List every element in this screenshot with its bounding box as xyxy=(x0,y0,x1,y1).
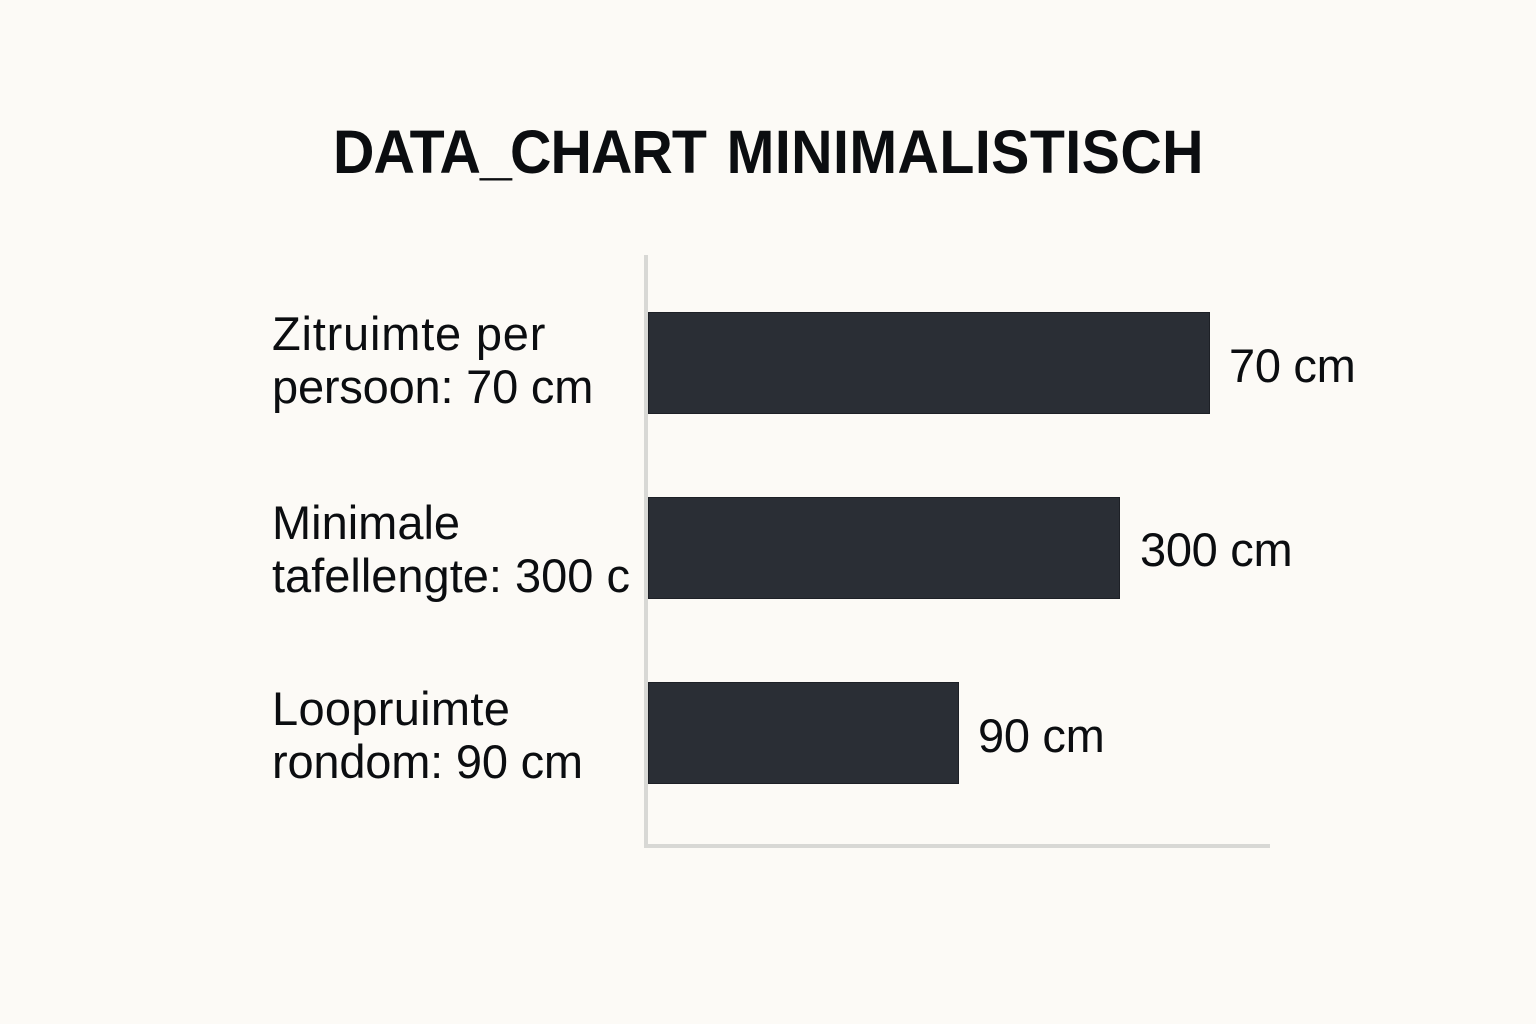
label: Zitruimte: Zitruimte per xyxy=(272,307,546,360)
bar: 70 cm xyxy=(648,312,1210,414)
bar: 90 cm xyxy=(648,682,959,784)
value: 70 cm: 70 cm xyxy=(1229,339,1356,392)
label: Minimale tafellengte: tafellengte: 300 c xyxy=(272,549,630,602)
label: Zitruimte xyxy=(272,307,593,413)
value: 300 cm: 300 cm xyxy=(1140,523,1292,576)
bar: 300 cm xyxy=(648,497,1120,599)
chart axes xyxy=(644,255,1270,848)
label: Loopruimte: Loopruimte xyxy=(272,682,510,735)
label: Loopruimte: rondom: 90 cm xyxy=(272,735,583,788)
label: Zitruimte: persoon: 70 cm xyxy=(272,360,593,413)
title: DATA_CHART MINIMALISTISCH xyxy=(333,118,1204,186)
label: Loopruimte xyxy=(272,682,583,788)
label: Minimale tafellengte: Minimale xyxy=(272,496,460,549)
label: Minimale tafellengte xyxy=(272,496,630,602)
value: 90 cm: 90 cm xyxy=(978,709,1104,762)
